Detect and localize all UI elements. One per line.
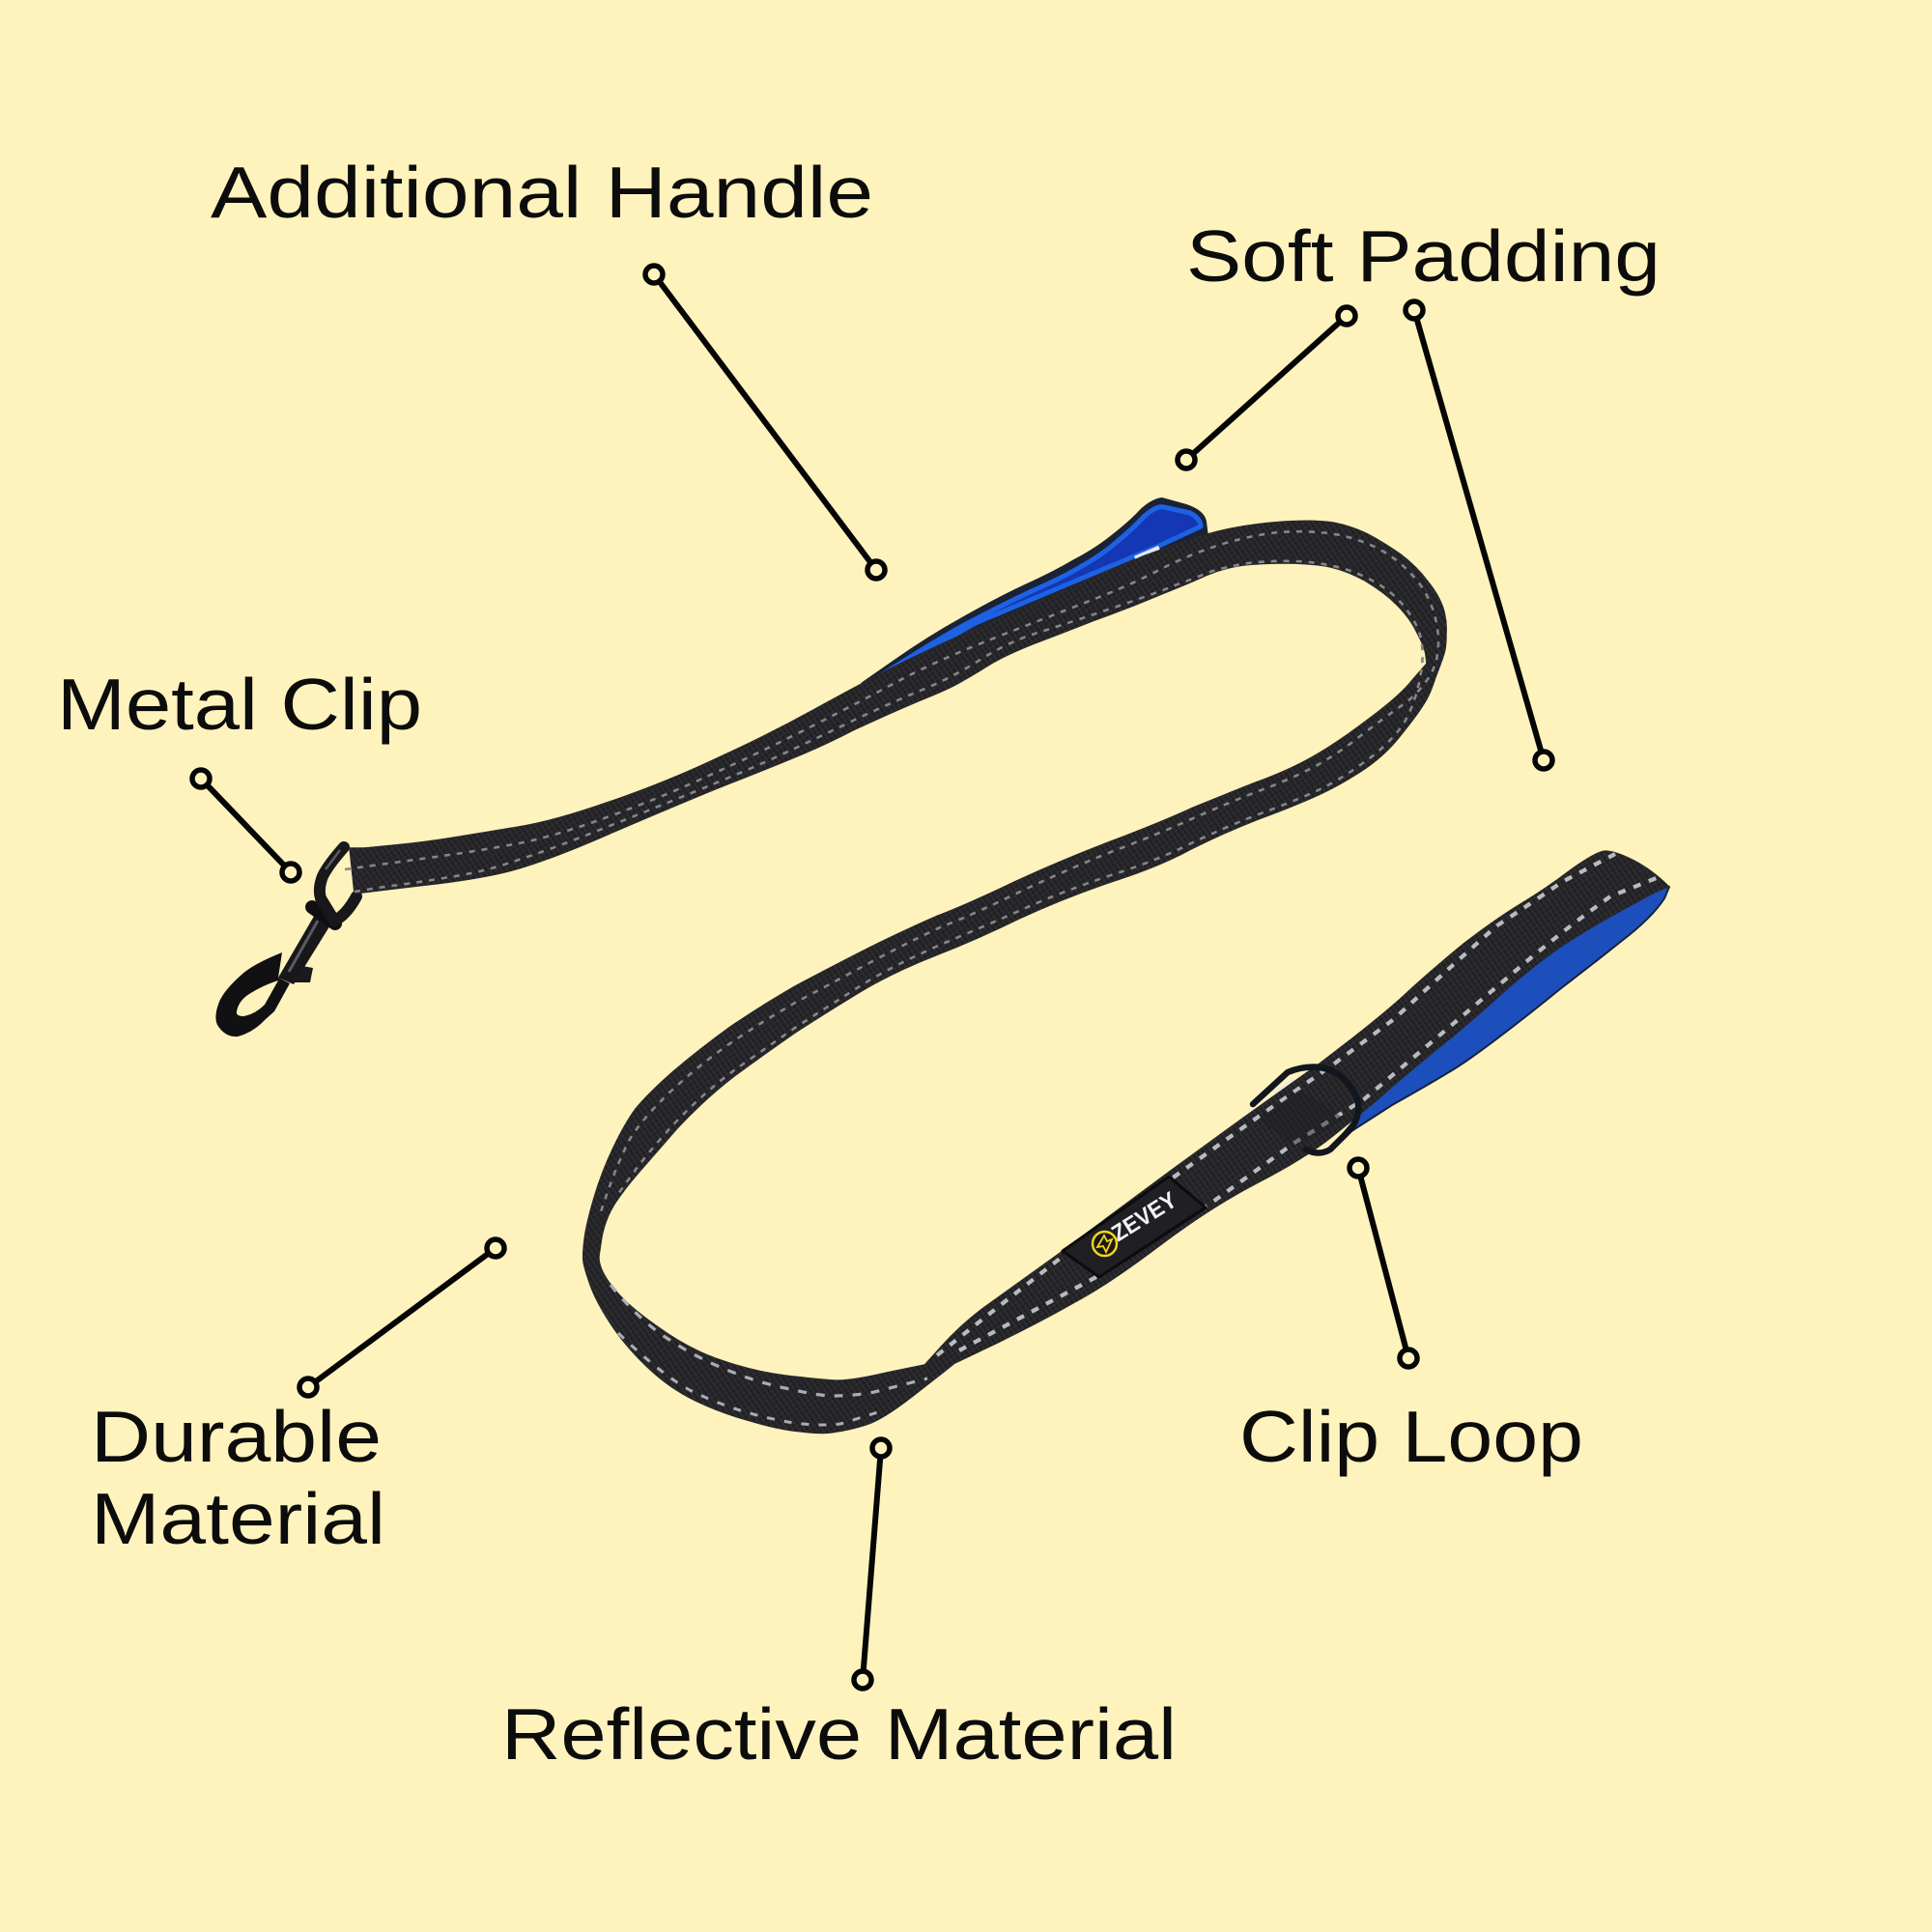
handle blue padding [874,507,1201,680]
callout: soft padding left [1178,307,1355,469]
D-ring highlight [1275,1079,1294,1093]
clip barrel [278,913,331,984]
label: Durable Material [91,1396,385,1559]
swivel collar [312,907,335,923]
main handle [924,851,1669,1365]
clip hook [215,952,290,1037]
D-ring [1253,1067,1358,1153]
webbing fold under ring [1259,1090,1345,1148]
logo badge [1093,1232,1117,1256]
callout: reflective material [854,1439,890,1689]
strap weave texture [350,521,1446,1434]
barrel highlight [289,921,318,972]
label: Durable Material: Durable [91,1396,382,1477]
brand name: ZEVEY [1107,1187,1181,1247]
handle webbing [924,851,1669,1365]
strap body [350,521,1446,1434]
callout: clip loop [1350,1159,1417,1367]
label: Metal Clip: Metal Clip [57,664,422,745]
callout: additional handle [645,266,885,579]
strap reflective stitching, top line [345,531,1438,1217]
handle back [863,498,1208,688]
padded additional handle [863,498,1208,688]
leash product illustration [215,498,1669,1434]
lower bend stitching [611,1285,927,1396]
callout: durable material [299,1239,504,1396]
callout: soft padding right [1406,301,1552,769]
swivel loop [320,847,356,921]
metal clip [215,847,356,1037]
white lining sliver [1135,548,1159,558]
handle stitching, upper [937,854,1615,1355]
label: Durable Material: Material [91,1478,385,1559]
label patch [1063,1177,1206,1277]
brand label [1063,1177,1206,1277]
label: Soft Padding: Soft Padding [1186,215,1661,297]
logo mark [1097,1236,1112,1252]
handle weave texture [924,851,1669,1365]
label: Additional Handle: Additional Handle [211,152,873,233]
handle stitching, lower [959,877,1659,1350]
handle blue padding [1338,884,1669,1140]
clip trigger [293,966,313,982]
strap reflective stitching, bottom line [355,561,1423,1198]
label: Clip Loop: Clip Loop [1239,1396,1583,1477]
callout: metal clip [192,770,299,881]
loop highlight [326,850,340,869]
label: Reflective Material: Reflective Material [501,1693,1177,1775]
main strap [345,521,1446,1434]
lower bend outer stitching [618,1333,884,1425]
